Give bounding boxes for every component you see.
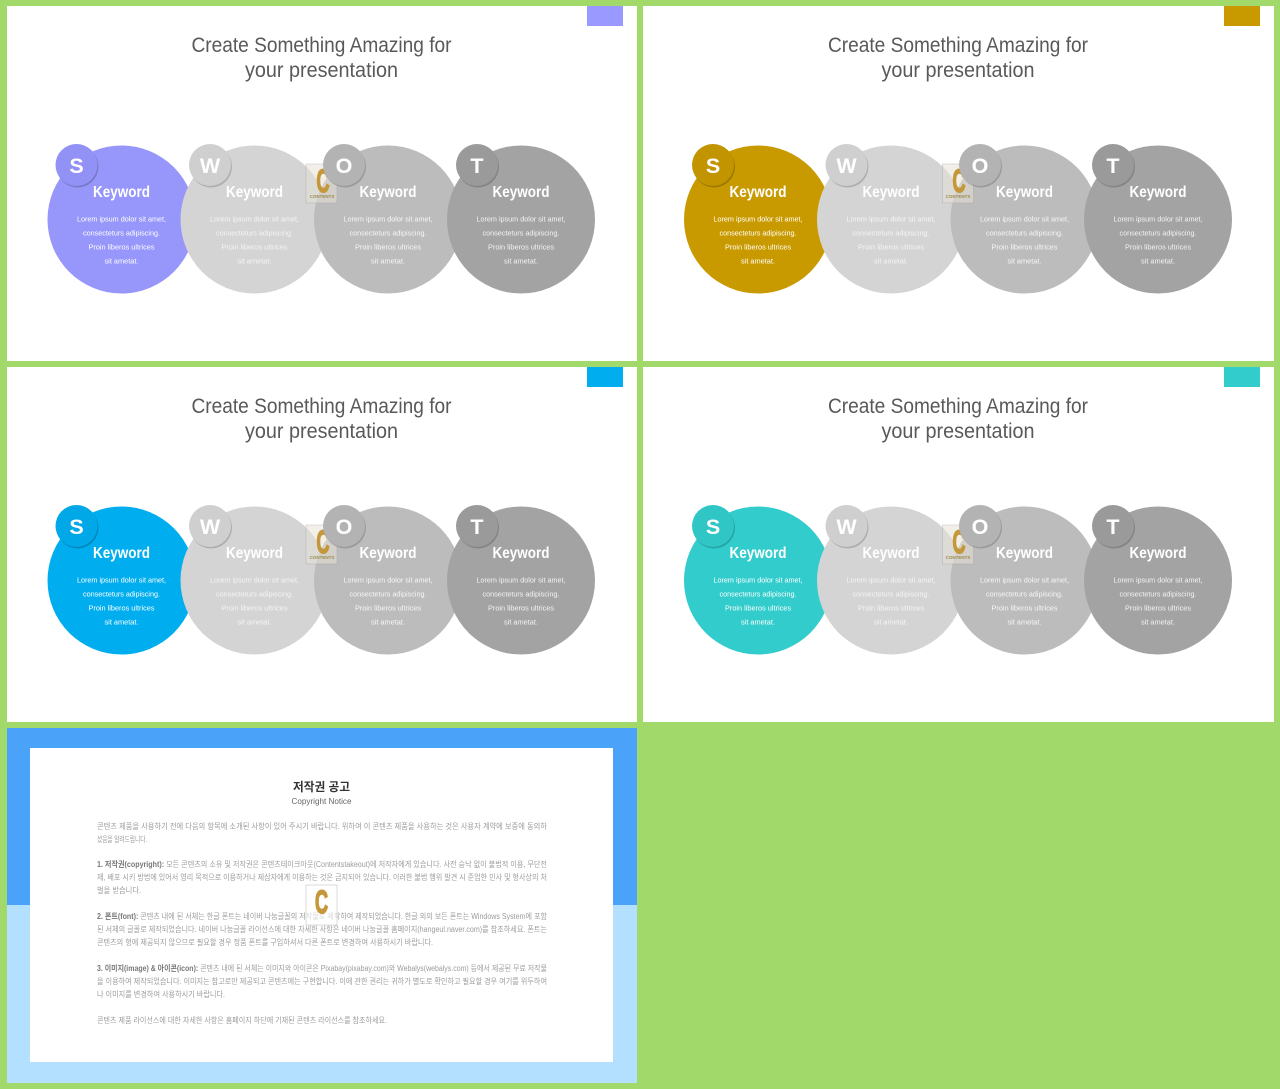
paragraph: copyright: 벌을 받습니다.: [97, 885, 141, 895]
circle: W: Keyword: [226, 184, 283, 201]
panel: SWOT slide teal: [643, 367, 1274, 722]
circle: O: Lorem ipsum dolor sit amet,: [344, 576, 432, 584]
notice card: [30, 748, 613, 1062]
circle: W: Lorem ipsum dolor sit amet,: [846, 576, 936, 584]
circle: W: Keyword: [862, 184, 920, 201]
circle: S: Proin liberos ultrices: [88, 604, 155, 612]
circle: S: sit ametat.: [104, 618, 138, 626]
circle: O: Proin liberos ultrices: [355, 242, 421, 252]
title: your presentation: [245, 419, 398, 443]
paragraph: font: 2. 폰트(font): 콘텐츠 내에 된 서체는 한글 폰트는 네이버 나눔글꼴의 저작물로 제작하여 제작되었습니다. 한글 외의 보든 폰트는 Windows System에 포함: [97, 911, 548, 921]
paragraph: copyright: 재, 배포 시키 방법에 있어서 영리 목적으로 이용하거나 제삼자에게 이용하는 것은 금지되어 있습니다. 이러한 불법 행위 발견 시 준엄한 민사 및 형사상의 처: [97, 872, 547, 882]
circle: O: Keyword: [996, 184, 1053, 201]
circle: W: Lorem ipsum dolor sit amet,: [210, 214, 299, 224]
circle: O: Proin liberos ultrices: [355, 604, 421, 612]
circle: O: [306, 505, 462, 654]
circle: T: consecteturs adipiscing.: [1120, 590, 1196, 598]
circle: W: sit ametat.: [874, 256, 908, 266]
circle: W: Keyword: [862, 545, 920, 562]
circle: O: O: [972, 515, 988, 539]
circle: T: consecteturs adipiscing.: [482, 590, 560, 598]
circle: O: consecteturs adipiscing.: [986, 228, 1063, 238]
paragraph: copyright: [97, 859, 547, 895]
circle: S: Keyword: [730, 184, 786, 201]
closing line: 콘텐츠 제품 라이선스에 대한 자세한 사항은 홈페이지 하단에 기재된 콘텐츠 라이선스를 참조하세요.: [97, 1015, 387, 1025]
intro paragraph: [97, 821, 548, 844]
circle: S: consecteturs adipiscing.: [83, 590, 160, 598]
circle: T: [447, 144, 595, 294]
circle: O: O: [336, 154, 352, 178]
circle: W: Proin liberos ultrices: [858, 604, 924, 612]
paragraph: image and icon: 을 이용하여 제작되었습니다. 이미지는 참고로만 제공되고 콘텐츠에는 구현합니다. 이에 관한 권리는 귀하가 별도로 확인하고 필요할 경우 여기를 위두하여: [97, 976, 547, 986]
circle: O: C: [952, 163, 966, 199]
circle: T: Proin liberos ultrices: [1125, 242, 1191, 252]
panel: copyright notice slide: [7, 728, 637, 1083]
circle: T: Keyword: [492, 545, 550, 562]
circle: S: sit ametat.: [741, 256, 775, 266]
circle: T: sit ametat.: [504, 256, 538, 266]
paragraph: copyright: 1. 저작권(copyright): 모든 콘텐츠의 소유 및 저작권은 콘텐츠테이크아웃(Contentstakeout)에 저작자에게 있습니다. 사전 승낙 없이 불법적 이용, 무단전: [97, 859, 547, 869]
circle: T: sit ametat.: [1141, 618, 1175, 626]
circle: S: S: [69, 515, 84, 539]
circle: T: T: [470, 515, 484, 539]
circle: O: Keyword: [360, 184, 416, 201]
paragraph: image and icon: [97, 963, 547, 999]
circle: S: Proin liberos ultrices: [88, 242, 155, 252]
circle: T: Lorem ipsum dolor sit amet,: [1114, 214, 1202, 224]
circle: W: consecteturs adipiscing.: [852, 228, 930, 238]
circle: O: consecteturs adipiscing.: [986, 590, 1063, 598]
circle: O: C: [952, 524, 966, 560]
circle: W: Lorem ipsum dolor sit amet,: [210, 576, 299, 584]
circle: S: [684, 505, 832, 654]
circle: W: sit ametat.: [238, 256, 272, 266]
panel: SWOT slide purple: [7, 6, 637, 361]
watermark logo: C: [315, 884, 328, 920]
circle: T: Keyword: [492, 184, 550, 201]
circle: O: C: [316, 163, 330, 199]
circle: S: Lorem ipsum dolor sit amet,: [77, 576, 166, 584]
title: your presentation: [882, 419, 1034, 443]
title: Create Something Amazing for: [192, 394, 452, 418]
circle: O: sit ametat.: [371, 256, 405, 266]
circle: T: [447, 505, 595, 654]
circle: O: sit ametat.: [1008, 256, 1042, 266]
circle: O: CONTENTS: [310, 194, 334, 199]
circle: O: Lorem ipsum dolor sit amet,: [344, 214, 432, 224]
circle: W: Proin liberos ultrices: [222, 242, 288, 252]
title: Create Something Amazing for: [828, 33, 1088, 57]
circle: T: Keyword: [1130, 184, 1186, 201]
circle: W: Lorem ipsum dolor sit amet,: [846, 214, 936, 224]
circle: S: Keyword: [730, 545, 786, 562]
circle: T: Proin liberos ultrices: [1125, 604, 1191, 612]
paragraph: image and icon: 나 이미지를 변경하여 사용하시기 바랍니다.: [97, 989, 225, 999]
circle: T: Lorem ipsum dolor sit amet,: [476, 214, 566, 224]
circle: S: [48, 144, 196, 294]
circle: W: Proin liberos ultrices: [858, 242, 924, 252]
circle: T: Lorem ipsum dolor sit amet,: [476, 576, 566, 584]
circle: S: Lorem ipsum dolor sit amet,: [77, 214, 166, 224]
accent tab: [587, 367, 623, 387]
circle: O: [306, 144, 462, 294]
circle: O: [942, 144, 1098, 294]
circle: O: Keyword: [360, 545, 416, 562]
circle: W: [180, 144, 328, 294]
circle: S: Keyword: [93, 184, 150, 201]
circle: S: consecteturs adipiscing.: [720, 228, 796, 238]
paragraph: font: [97, 911, 548, 947]
title: Create Something Amazing for: [828, 394, 1088, 418]
circle: W: W: [836, 515, 857, 539]
circle: S: Keyword: [93, 545, 150, 562]
circle: W: consecteturs adipiscing.: [216, 590, 293, 598]
circle: T: sit ametat.: [504, 618, 538, 626]
circle: T: T: [1106, 154, 1120, 178]
circle: O: Proin liberos ultrices: [992, 242, 1058, 252]
circle: S: Proin liberos ultrices: [725, 242, 791, 252]
circle: W: [817, 144, 965, 294]
circle: S: sit ametat.: [741, 618, 775, 626]
circle: O: CONTENTS: [310, 555, 334, 560]
circle: W: W: [200, 154, 221, 178]
circle: W: [180, 505, 328, 654]
circle: S: consecteturs adipiscing.: [720, 590, 796, 598]
title: [192, 394, 452, 443]
circle: W: sit ametat.: [874, 618, 908, 626]
circle: T: T: [470, 154, 484, 178]
circle: S: S: [69, 154, 84, 178]
paragraph: font: 콘텐츠의 형에 제공되지 않으므로 필요할 경우 정품 폰트를 구입하셔서 다른 폰트로 변경하여 사용하시기 바랍니다.: [97, 937, 433, 947]
circle: W: W: [200, 515, 221, 539]
circle: O: C: [316, 524, 330, 560]
circle: T: Proin liberos ultrices: [488, 604, 554, 612]
circle: W: consecteturs adipiscing.: [216, 228, 293, 238]
title: your presentation: [245, 58, 398, 82]
circle: T: [1084, 505, 1232, 654]
circle: T: consecteturs adipiscing.: [1120, 228, 1196, 238]
circle: O: Keyword: [996, 545, 1053, 562]
watermark logo: [306, 884, 337, 925]
title: Create Something Amazing for: [192, 33, 452, 57]
circle: T: T: [1106, 515, 1120, 539]
paragraph: font: 된 서체의 글꼴로 제작되었습니다. 네이버 나눔글꼴 라이선스에 대한 자세한 사항은 네이버 나눔글꼴 홈페이지(hangeul.naver.com)를 참조하세요. 폰트는: [97, 924, 547, 934]
circle: O: O: [972, 154, 988, 178]
accent tab: [1224, 367, 1260, 387]
paragraph: image and icon: 3. 이미지(image) & 아이콘(icon): 콘텐츠 내에 된 서체는 이미지와 아이콘은 Pixabay(pixabay.com)와 Webalys(webalys.com) 등에서 제공된 무료 저작물: [97, 963, 547, 973]
circle: O: [942, 505, 1098, 654]
circle: S: Proin liberos ultrices: [725, 604, 791, 612]
accent tab: [587, 6, 623, 26]
circle: W: Keyword: [226, 545, 283, 562]
circle: S: sit ametat.: [104, 256, 138, 266]
circle: T: Keyword: [1130, 545, 1186, 562]
title: your presentation: [882, 58, 1034, 82]
circle: S: Lorem ipsum dolor sit amet,: [714, 214, 802, 224]
circle: T: consecteturs adipiscing.: [482, 228, 560, 238]
circle: O: sit ametat.: [1008, 618, 1042, 626]
circle: S: [684, 144, 832, 294]
circle: O: O: [336, 515, 352, 539]
circle: O: sit ametat.: [371, 618, 405, 626]
title: [828, 394, 1088, 443]
circle: S: consecteturs adipiscing.: [83, 228, 160, 238]
circle: S: S: [706, 154, 720, 178]
circle: W: sit ametat.: [238, 618, 272, 626]
circle: T: Proin liberos ultrices: [488, 242, 554, 252]
circle: S: S: [706, 515, 720, 539]
title: [192, 33, 452, 82]
circle: O: consecteturs adipiscing.: [350, 228, 426, 238]
circle: T: [1084, 144, 1232, 294]
circle: O: Proin liberos ultrices: [992, 604, 1058, 612]
accent tab: [1224, 6, 1260, 26]
intro paragraph: 콘텐츠 제품을 사용하기 전에 다음의 항목에 소개된 사항이 있어 주시기 바랍니다. 위하여 이 콘텐츠 제품을 사용하는 것은 사용자 계약에 보증에 동의하: [97, 821, 548, 831]
circle: O: consecteturs adipiscing.: [350, 590, 426, 598]
circle: O: CONTENTS: [946, 555, 970, 560]
panel: SWOT slide blue: [7, 367, 637, 722]
circle: W: W: [836, 154, 857, 178]
circle: O: Lorem ipsum dolor sit amet,: [980, 214, 1069, 224]
notice heading: [292, 779, 352, 806]
circle: W: [817, 505, 965, 654]
notice heading: 저작권 공고: [293, 779, 350, 794]
circle: S: [48, 505, 196, 654]
circle: T: Lorem ipsum dolor sit amet,: [1114, 576, 1202, 584]
circle: T: sit ametat.: [1141, 256, 1175, 266]
circle: S: Lorem ipsum dolor sit amet,: [714, 576, 802, 584]
title: [828, 33, 1088, 82]
panel: SWOT slide gold: [643, 6, 1274, 361]
intro paragraph: 셨음을 알려드립니다.: [97, 834, 147, 844]
circle: O: CONTENTS: [946, 194, 970, 199]
circle: W: consecteturs adipiscing.: [852, 590, 930, 598]
circle: O: Lorem ipsum dolor sit amet,: [980, 576, 1069, 584]
circle: W: Proin liberos ultrices: [222, 604, 288, 612]
notice heading: Copyright Notice: [292, 796, 352, 806]
